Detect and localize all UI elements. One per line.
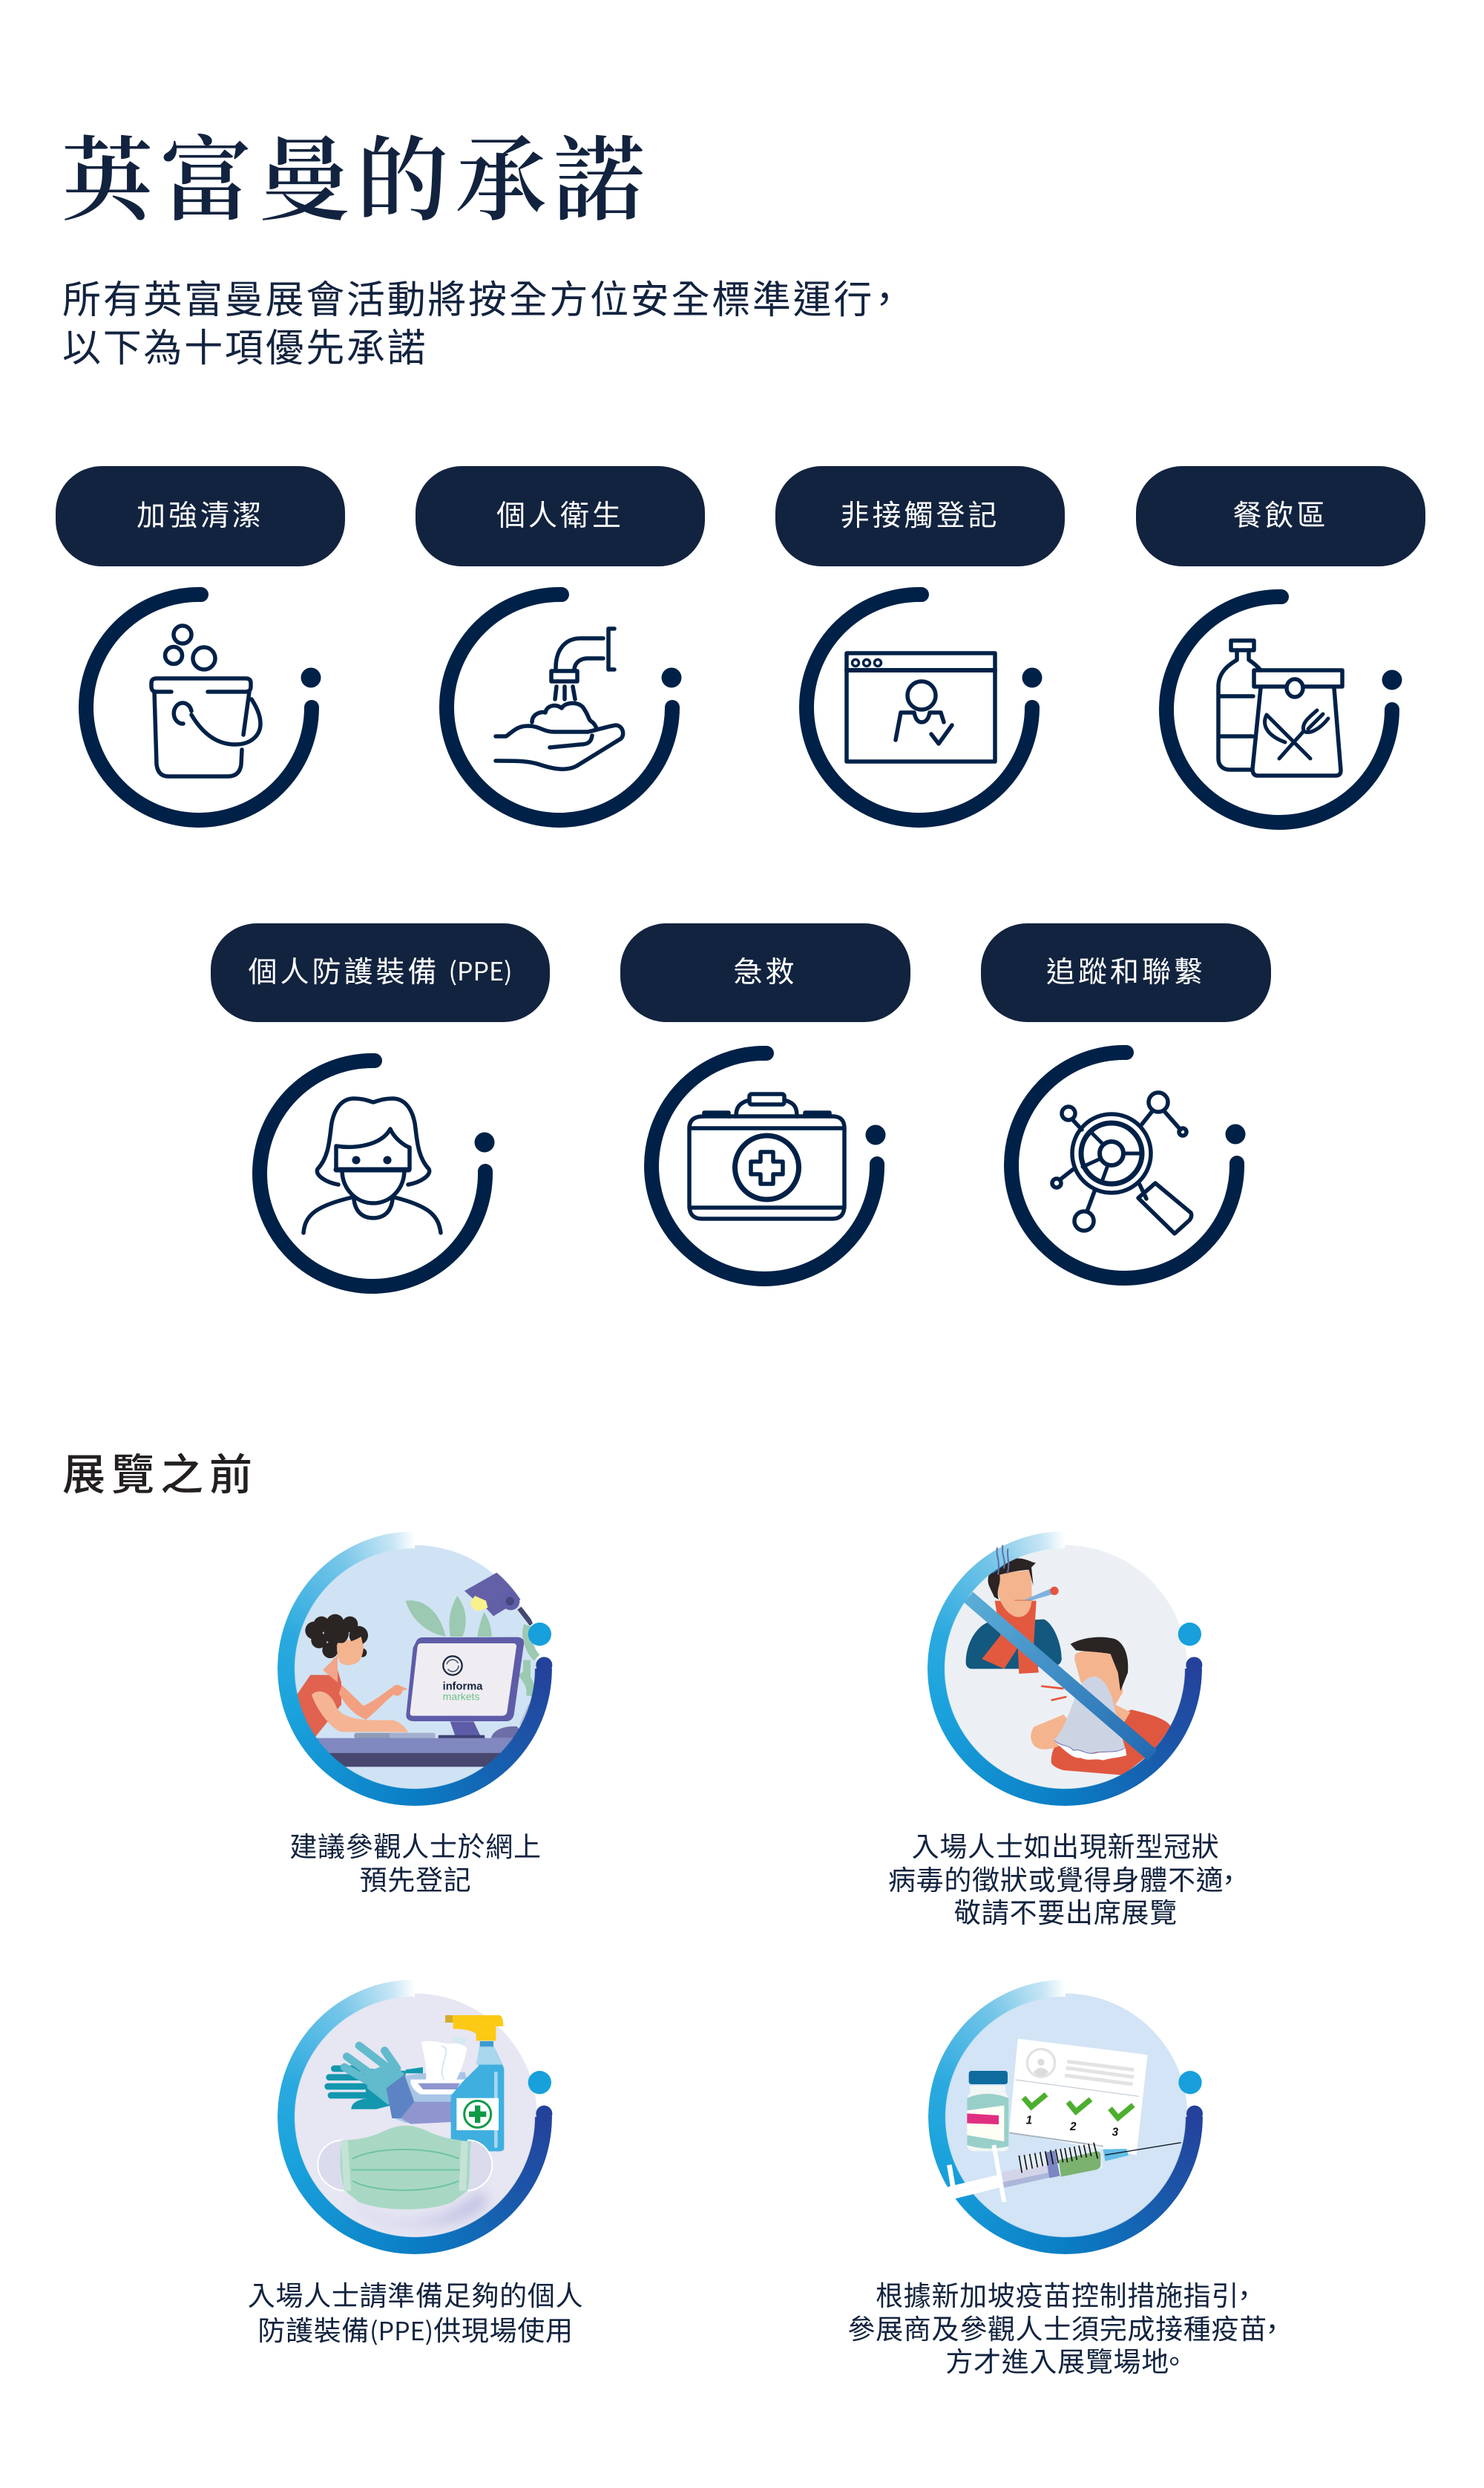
- caption: 敬請不要出席展覽: [953, 1898, 1178, 1928]
- illustration: do not attend if unwell: [928, 1532, 1202, 1806]
- progress ring: [278, 1531, 552, 1806]
- illustration: online pre-registration: informa: [443, 1681, 483, 1693]
- illustration: bring PPE: [278, 1980, 552, 2254]
- icon: person with mask: [260, 1061, 494, 1286]
- icon: online registration window: [807, 595, 1042, 820]
- intro text: 所有英富曼展會活動將按全方位安全標準運行，: [62, 279, 906, 322]
- caption: 入場人士請準備足夠的個人: [248, 2281, 583, 2311]
- caption: 入場人士如出現新型冠狀: [912, 1832, 1219, 1862]
- caption: 建議參觀人士於網上: [289, 1832, 542, 1862]
- icon: bucket: [86, 595, 321, 820]
- icon: food and drink: [1166, 597, 1402, 822]
- caption: [289, 1832, 542, 1896]
- pill: personal hygiene: 個人衛生: [496, 500, 624, 531]
- pill: PPE: [211, 923, 550, 1022]
- illustration: vaccination: [928, 1980, 1203, 2254]
- progress ring: [928, 1531, 1202, 1806]
- pill: tracing: [981, 923, 1271, 1022]
- intro text: 以下為十項優先承諾: [62, 327, 427, 370]
- caption: 預先登記: [360, 1865, 471, 1896]
- illustration: vaccination: 3: [1112, 2127, 1119, 2139]
- caption: 參展商及參觀人士須完成接種疫苗，: [847, 2314, 1287, 2345]
- caption: 方才進入展覽場地。: [945, 2347, 1189, 2377]
- icon: first aid kit: [651, 1053, 886, 1279]
- illustration: vaccination: 1: [1026, 2115, 1032, 2127]
- intro text: [62, 279, 906, 370]
- progress ring: [278, 1980, 552, 2254]
- caption: [248, 2281, 583, 2348]
- caption: [888, 1832, 1243, 1928]
- caption: 病毒的徵狀或覺得身體不適，: [888, 1865, 1243, 1896]
- pill: first aid: [620, 923, 910, 1022]
- caption: [847, 2281, 1287, 2377]
- pill: enhanced cleaning: 加強清潔: [137, 500, 264, 531]
- illustration: online pre-registration: markets: [443, 1691, 479, 1703]
- pill: tracing: 追蹤和聯繫: [1046, 956, 1206, 989]
- icon: magnifier network: [1011, 1053, 1245, 1278]
- pill: food and beverage: 餐飲區: [1232, 500, 1328, 531]
- pill: PPE: (PPE): [448, 952, 513, 988]
- caption: 根據新加坡疫苗控制措施指引，: [876, 2281, 1258, 2311]
- section heading: 展覽之前: [62, 1451, 258, 1499]
- progress ring: [928, 1980, 1203, 2254]
- pill: food and beverage: [1136, 466, 1425, 566]
- commitment icons: [79, 587, 1402, 1294]
- illustration: vaccination: 2: [1069, 2121, 1077, 2133]
- icon: hand washing: [447, 595, 681, 820]
- pill: PPE: 個人防護裝備: [248, 956, 439, 989]
- pill: first aid: 急救: [733, 956, 797, 989]
- illustration: online pre-registration: [278, 1532, 552, 1806]
- caption: 防護裝備(PPE)供現場使用: [257, 2311, 574, 2348]
- title: 英富曼的承諾: [62, 131, 651, 232]
- pill: enhanced cleaning: [56, 466, 345, 566]
- pill: contactless registration: [775, 466, 1065, 566]
- pill: contactless registration: 非接觸登記: [840, 500, 1000, 531]
- pill: personal hygiene: [416, 466, 705, 566]
